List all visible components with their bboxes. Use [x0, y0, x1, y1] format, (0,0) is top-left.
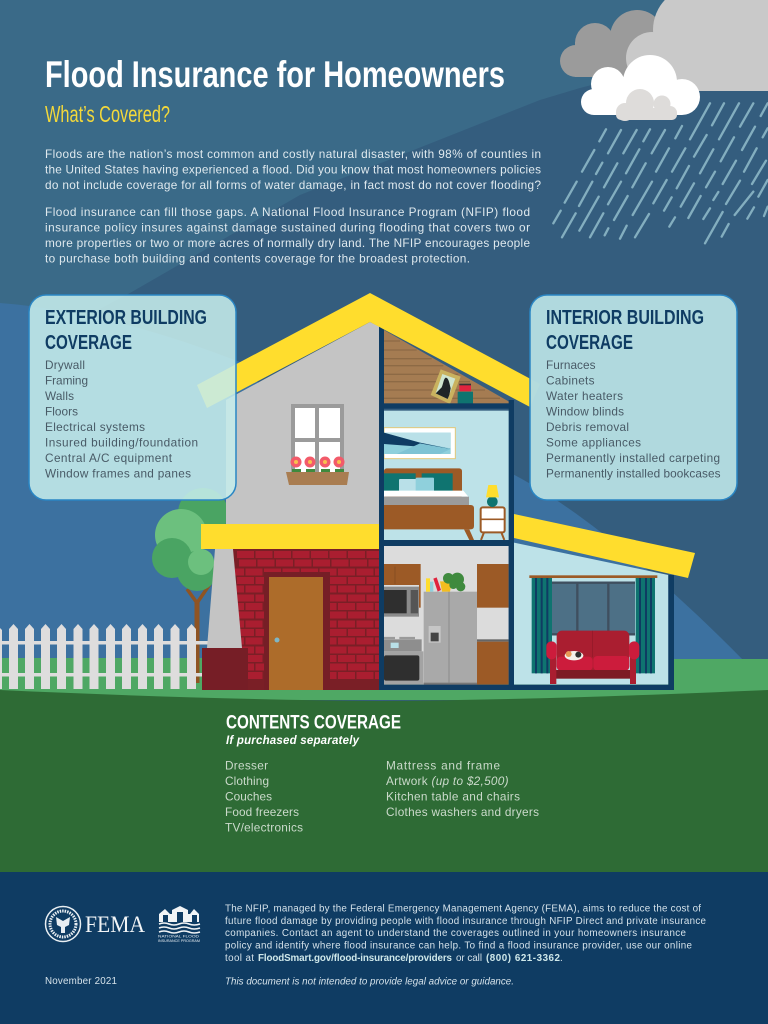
- footer description: future flood damage by providing people with flood insurance through NFIP Direct and private insurance: [225, 916, 707, 927]
- panel: exterior building coverage: Drywall: [45, 358, 85, 372]
- contents list: column 2: Kitchen table and chairs: [386, 790, 520, 804]
- footer description: [225, 904, 707, 964]
- brick ground floor wall: [233, 549, 380, 690]
- intro paragraph 1: [45, 147, 541, 192]
- intro paragraph 2: Flood insurance can fill those gaps. A National Flood Insurance Program (NFIP) flood: [45, 205, 530, 219]
- panel: exterior building coverage: Electrical systems: [45, 420, 145, 434]
- panel: interior building coverage: Permanently installed carpeting: [546, 451, 720, 465]
- panel: interior building coverage: INTERIOR BUILDING: [546, 307, 704, 329]
- ground: dark green: [0, 690, 768, 875]
- tree: [152, 488, 228, 683]
- footer band: [0, 872, 768, 1024]
- bedroom: [384, 411, 509, 541]
- panel: interior building coverage: Water heaters: [546, 389, 623, 403]
- storm clouds: [560, 0, 768, 121]
- contents list: column 1: Couches: [225, 790, 272, 804]
- panel: exterior building coverage: COVERAGE: [45, 332, 132, 354]
- panel: interior building coverage: Permanently installed bookcases: [546, 466, 721, 480]
- title: Flood Insurance for Homeowners: [45, 54, 505, 95]
- footer description: FloodSmart.gov/flood-insurance/providers: [258, 953, 453, 964]
- upstairs window with flower box: [286, 404, 349, 485]
- footer description: (800) 621-3362: [486, 953, 561, 964]
- panel: interior building coverage: Window blinds: [546, 404, 624, 418]
- main roof: [197, 293, 540, 408]
- intro paragraph 2: to purchase both building and contents coverage for the broadest protection.: [45, 252, 470, 266]
- intro paragraph 2: [45, 205, 530, 266]
- panel: interior building coverage: COVERAGE: [546, 332, 633, 354]
- icon: NFIP logo: [158, 906, 200, 943]
- footer description: The NFIP, managed by the Federal Emergency Management Agency (FEMA), aims to reduce the cost of: [225, 904, 701, 914]
- intro paragraph 1: Floods are the nation’s most common and costly natural disaster, with 98% of counties in: [45, 147, 541, 161]
- panel: exterior building coverage: Insured building/foundation: [45, 436, 198, 450]
- panel: exterior building coverage: Floors: [45, 404, 78, 418]
- footer description: .: [560, 953, 563, 964]
- contents list: column 2: Clothes washers and dryers: [386, 805, 539, 819]
- footer description: or call: [456, 953, 482, 964]
- footer description: companies. Contact an agent to understand the coverages outlined in your homeowners insurance: [225, 928, 687, 939]
- panel: interior building coverage: [530, 295, 737, 500]
- house: [197, 293, 695, 690]
- contents list: column 2: Artwork (up to $2,500): [386, 774, 509, 788]
- panel: interior building coverage: Cabinets: [546, 374, 595, 388]
- intro paragraph 2: more properties or two or more acres of normally dry land. The NFIP encourages people: [45, 236, 530, 250]
- gray upper wall: [226, 322, 380, 530]
- contents list: column 1: Food freezers: [225, 805, 299, 819]
- door: [264, 572, 330, 690]
- intro paragraph 1: do not include coverage for all forms of water damage, in fact most do not cover flooding?: [45, 178, 541, 192]
- panel: exterior building coverage: Central A/C equipment: [45, 451, 173, 465]
- panel: interior building coverage: Furnaces: [546, 358, 596, 372]
- icon: NFIP logo: INSURANCE PROGRAM: [158, 939, 200, 943]
- structural walls: [379, 327, 674, 690]
- panel: interior building coverage: Some appliances: [546, 436, 641, 450]
- panel: exterior building coverage: Framing: [45, 374, 88, 388]
- porch roof band: [201, 524, 380, 549]
- contents list: column 2: Mattress and frame: [386, 758, 500, 772]
- contents list: column 1: Dresser: [225, 758, 268, 772]
- ground: light green: [0, 658, 768, 700]
- panel: interior building coverage: Debris removal: [546, 420, 629, 434]
- living room roof: [514, 514, 695, 578]
- contents coverage heading: If purchased separately: [226, 735, 360, 747]
- contents coverage heading: [226, 712, 401, 747]
- panel: exterior building coverage: [29, 295, 236, 500]
- footer description: tool at: [225, 953, 254, 964]
- disclaimer: This document is not intended to provide legal advice or guidance.: [225, 976, 514, 988]
- panel: exterior building coverage: Window frames and panes: [45, 466, 191, 480]
- kitchen: [384, 546, 509, 685]
- contents list: column 2: [386, 758, 539, 819]
- FEMA wordmark: FEMA: [85, 912, 145, 937]
- icon: DHS seal: [46, 906, 80, 942]
- footer description: policy and identify where flood insurance can help. To find a flood insurance provider, use our online: [225, 940, 693, 952]
- picket fence: [0, 624, 214, 689]
- subtitle: What’s Covered?: [45, 101, 170, 127]
- contents list: column 1: [225, 758, 303, 834]
- icon: NFIP logo: NATIONAL FLOOD: [158, 934, 199, 938]
- porch column: [202, 549, 248, 690]
- publication date: November 2021: [45, 976, 117, 987]
- living room: [514, 543, 668, 685]
- contents list: column 1: Clothing: [225, 774, 269, 788]
- rain: [553, 103, 768, 243]
- panel: exterior building coverage: EXTERIOR BUILDING: [45, 307, 207, 329]
- panel: exterior building coverage: Walls: [45, 389, 74, 403]
- contents list: column 1: TV/electronics: [225, 820, 303, 834]
- intro paragraph 2: insurance policy insures against damage sustained during flooding that covers two or: [45, 220, 530, 234]
- contents coverage heading: CONTENTS COVERAGE: [226, 712, 401, 734]
- attic: [384, 330, 509, 405]
- intro paragraph 1: the United States having experienced a flood. Did you know that most homeowners policies: [45, 162, 541, 176]
